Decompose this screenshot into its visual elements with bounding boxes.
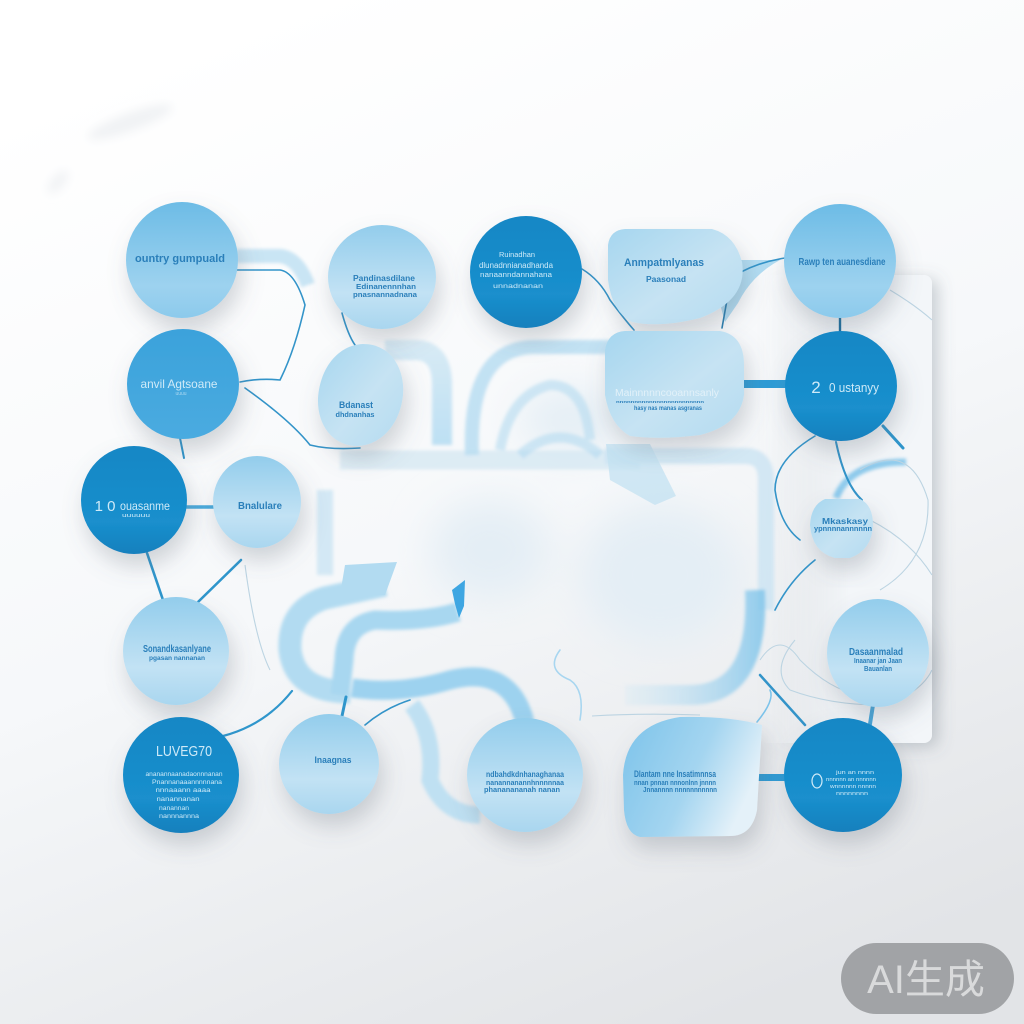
node: left medium circle: uuuu (175, 391, 187, 397)
node: right dark circle: 0 ustanyy (829, 380, 879, 395)
node: bottom left dark circle: nanannanan (156, 796, 200, 803)
node: top rounded box: Anmpatmlyanas (624, 257, 704, 269)
ribbon: left C curve (290, 585, 385, 692)
node: pale egg: dhdnanhas (336, 412, 375, 419)
node: top dark circle: unnadnanan (493, 284, 543, 290)
node: lower left pale circle: Sonandkasanlyane (143, 644, 211, 655)
ribbon: horizontal band (340, 450, 640, 470)
arrowhead ribbon tip (452, 580, 465, 618)
ribbon: bottom arch (352, 677, 525, 722)
node: bottom rounded box: nnan pnnan nnnonlnn jnnnn (634, 780, 716, 787)
node: upper circle two: Edinanennnhan (356, 284, 416, 291)
ribbon: lower right curve (625, 590, 755, 695)
flow ribbons (236, 256, 906, 815)
node: bottom right dark circle (784, 718, 902, 832)
node: bottom rounded box (623, 717, 762, 837)
ribbon: left vertical (317, 490, 333, 575)
node: top rounded box (608, 229, 743, 324)
ribbon: upper left frame (385, 350, 442, 445)
ribbon pointer center right (606, 444, 676, 505)
node: bottom rounded box: Dlantam nne Insatimnnsa (634, 769, 717, 779)
node: left dark circle (81, 446, 187, 554)
node: bottom center circle: ndbahdkdnhanaghanaa (486, 770, 564, 779)
node: bottom rounded box: Jnnannnn nnnnnnnnnnn (643, 787, 717, 794)
node: top rounded box: Paasonad (646, 275, 686, 284)
node: top dark circle (470, 216, 582, 328)
ribbon: lower vertical (412, 705, 480, 815)
node: pale egg (318, 344, 403, 446)
node: left dark circle: ouasanme (120, 499, 170, 513)
node: lower right circle: Inaanar jan Jaan (854, 658, 902, 665)
node: bottom right dark circle: nnnnnn an nnnnnn (826, 777, 876, 783)
node: left dark circle: 1 0 (95, 498, 115, 515)
node: right dark circle: 2 (811, 378, 821, 397)
node: left dark circle: uuuuuu (122, 513, 150, 519)
thick connectors (147, 318, 903, 736)
node: bottom right dark circle: nnnnnnnn (836, 791, 868, 797)
node: bottom center circle: phananananah nanan (484, 787, 560, 794)
node: center rounded box: Mainnnnncooannsanly (615, 388, 719, 399)
node: upper circle two: Pandinasdilane (353, 274, 416, 283)
node: bottom center circle: nanannanannhnnnnnaa (486, 778, 565, 787)
node: top dark circle: dlunadnnianadhanda (479, 261, 554, 270)
node: bottom right dark circle: jun an nnnn (835, 770, 874, 776)
connector lines (237, 258, 862, 725)
ribbon: right small curl (836, 462, 906, 498)
node: small circle beside dark (213, 456, 301, 548)
decorative smudge top left (44, 98, 175, 197)
node: small circle beside dark: Bnalulare (238, 501, 282, 512)
node: top dark circle: nanaanndannahana (480, 272, 552, 279)
node: small right pale node: ypnnnnannnnnn (814, 526, 872, 533)
node: left medium circle: anvil Agtsoane (140, 377, 218, 391)
node: left medium circle (127, 329, 239, 439)
node: center rounded box (605, 331, 744, 438)
node: top right circle (784, 204, 896, 318)
node: pale egg: Bdanast (339, 400, 373, 410)
bar connectors (730, 380, 790, 388)
node: bottom left dark circle: nnnaaann aaaa (156, 787, 211, 794)
ribbon wedge between top box and top right circle (716, 250, 780, 322)
node: bottom left dark circle: Pnannanaaannnnnana (152, 779, 222, 786)
node: lower left pale circle (123, 597, 229, 705)
node: lower left pale circle: pgasan nannanan (149, 656, 205, 662)
node: bottom left dark circle: LUVEG70 (156, 743, 212, 760)
node: bottom left dark circle (123, 717, 239, 833)
node: center rounded box: nnnnnnnnnnnnnnnnnnnnnnnn (616, 399, 705, 404)
node: top left light circle: ountry gumpuald (135, 253, 225, 265)
ribbon: center swirl (500, 385, 600, 455)
node: upper circle two: pnasnannadnana (353, 292, 417, 299)
node: small right pale node: Mkaskasy (822, 517, 869, 526)
node: bottom left dark circle: nannnannna (159, 813, 199, 820)
node: right dark circle (785, 331, 897, 441)
node: top left light circle (126, 202, 238, 318)
watermark badge: AI生成 (867, 958, 985, 1002)
node: bottom small circle: Inaagnas (314, 755, 352, 765)
node: bottom left dark circle: nanannan (159, 805, 189, 812)
ribbon pointer lower left (340, 562, 397, 595)
ribbon: right frame (605, 456, 766, 610)
ribbon: node 1 to node 2 (236, 256, 308, 285)
ribbon: top center arch (472, 347, 612, 455)
node: bottom small circle (279, 714, 379, 814)
node: upper circle two (328, 225, 436, 329)
node: center rounded box: hasy nas manas asgranas (634, 406, 703, 412)
node: small right pale node (810, 499, 873, 558)
node: lower right circle: Dasaanmalad (849, 647, 903, 658)
node: bottom center circle (467, 718, 583, 832)
pale panel loops (245, 290, 932, 716)
node: bottom right dark circle: wnnnnnn nnnnn (829, 784, 876, 790)
node: lower right circle (827, 599, 929, 707)
ribbon: inner S curve (340, 612, 458, 695)
watermark badge (841, 943, 1014, 1014)
node: lower right circle: Bauanlan (864, 666, 892, 673)
node: top dark circle: Ruinadhan (499, 252, 535, 259)
node: bottom left dark circle: ananannaanadaonnnanan (146, 771, 223, 778)
node: top right circle: Rawp ten auanesdiane (798, 257, 886, 268)
backing panel (760, 275, 932, 743)
central cloud (430, 390, 740, 645)
